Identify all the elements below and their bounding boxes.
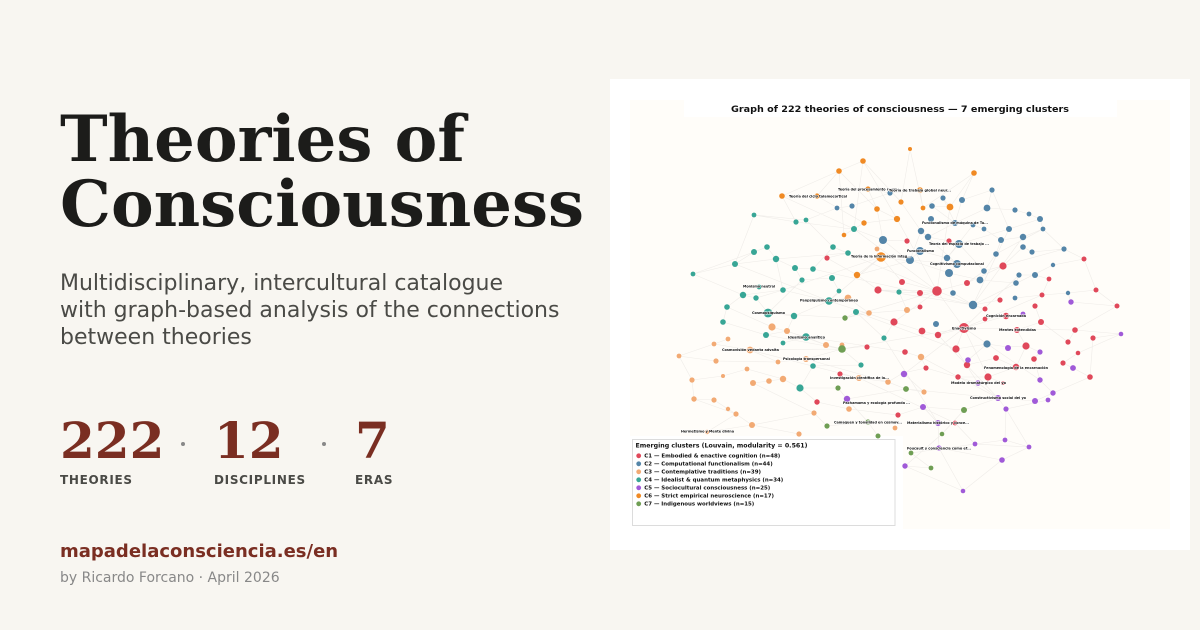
node labels: Enactivismo [952, 326, 976, 330]
graph heading: Graph of 222 theories of consciousness — 7 emerging clusters [731, 104, 1070, 115]
stat: 12 disciplines [214, 411, 306, 487]
separator dot [181, 442, 185, 446]
graph edges [678, 149, 1121, 491]
stat: 7 eras: 7 [355, 411, 390, 470]
node labels: Teoría del procesamiento recur... [838, 188, 901, 192]
title: Consciousness [60, 167, 584, 242]
stat: 12 disciplines: 12 [214, 411, 284, 470]
subtitle [60, 271, 559, 350]
legend title: Emerging clusters (Louvain, modularity = 0.561) [636, 442, 808, 450]
legend item C7: C7 — Indigenous worldviews (n=15) [644, 502, 754, 508]
legend item C5: C5 — Sociocultural consciousness (n=25) [644, 486, 770, 492]
node labels [681, 188, 1048, 450]
stats row [60, 411, 393, 487]
node labels: Cosmopsiquismo [752, 311, 785, 315]
node labels: Teoría del espacio de trabajo ... [929, 242, 990, 246]
stat: 12 disciplines: DISCIPLINES [214, 473, 306, 487]
node labels: Teoría de trabajo global neur... [889, 188, 952, 192]
legend item C1: C1 — Embodied & enactive cognition (n=48) [644, 454, 780, 460]
legend item C3: C3 — Contemplative traditions (n=39) [644, 470, 761, 476]
title [60, 102, 584, 242]
node labels: Funcionalismo [907, 249, 934, 253]
title: Theories of [60, 102, 465, 177]
subtitle: between theories [60, 325, 252, 350]
node labels: Fenomenología de la encarnación [984, 366, 1048, 370]
subtitle: Multidisciplinary, intercultural catalogue [60, 271, 503, 296]
node labels: Funcionalismo de máquina de Tu... [922, 221, 989, 225]
node labels: Psicología transpersonal [783, 357, 830, 361]
subtitle: with graph-based analysis of the connections [60, 298, 559, 323]
node labels: Cosmovisión vedanta advaita [722, 348, 779, 352]
node labels: Mentes extendidas [999, 328, 1037, 332]
node labels: Investigación científica de la... [830, 376, 890, 380]
node labels: Constructivismo social del yo [970, 396, 1026, 400]
byline: by Ricardo Forcano · April 2026 [60, 570, 280, 586]
node labels: Teoría de la información integ... [851, 254, 912, 258]
node labels: Monismo neutral [743, 284, 775, 288]
nodes: C5 sociocultural consciousness [844, 299, 1123, 493]
stat: 222 theories: THEORIES [60, 473, 133, 487]
separator dot [322, 442, 326, 446]
legend item C6: C6 — Strict empirical neuroscience (n=17) [644, 494, 774, 500]
node labels: Cognición encarnada [986, 314, 1026, 318]
website link: mapadelaconsciencia.es/en [60, 541, 338, 562]
node labels: Hermetismo y Mente divina [681, 430, 734, 434]
node labels: Camaquen y tonalidad en cosmov... [834, 420, 903, 424]
nodes: C6 strict empirical neuroscience [779, 147, 977, 278]
node labels: Pachamama y ecología profunda ... [843, 401, 911, 405]
node labels: Teoría del ciclo talamocortical [789, 194, 847, 198]
stat: 222 theories: 222 [60, 411, 164, 470]
legend item C2: C2 — Computational functionalism (n=44) [644, 462, 773, 468]
stat: 7 eras: ERAS [355, 473, 393, 487]
legend [632, 440, 895, 526]
nodes: C4 idealist and quantum metaphysics [691, 213, 902, 392]
nodes: C7 indigenous worldviews [824, 315, 967, 470]
nodes: C2 computational functionalism [835, 187, 1070, 348]
node labels: Idealismo analítico [788, 336, 825, 340]
node labels: Panpsiquismo contemporáneo [800, 298, 858, 302]
node labels: Materialismo histórico y conce... [907, 421, 970, 425]
nodes: C3 contemplative traditions [677, 247, 927, 437]
node labels: Cognitivismo computacional [930, 262, 984, 266]
node labels: Foucault y consciencia como ef... [907, 446, 972, 450]
legend item C4: C4 — Idealist & quantum metaphysics (n=34) [644, 478, 783, 484]
nodes: C1 embodied and enactive cognition [814, 238, 1120, 425]
node labels: Modelo dramatúrgico del yo [951, 381, 1006, 385]
